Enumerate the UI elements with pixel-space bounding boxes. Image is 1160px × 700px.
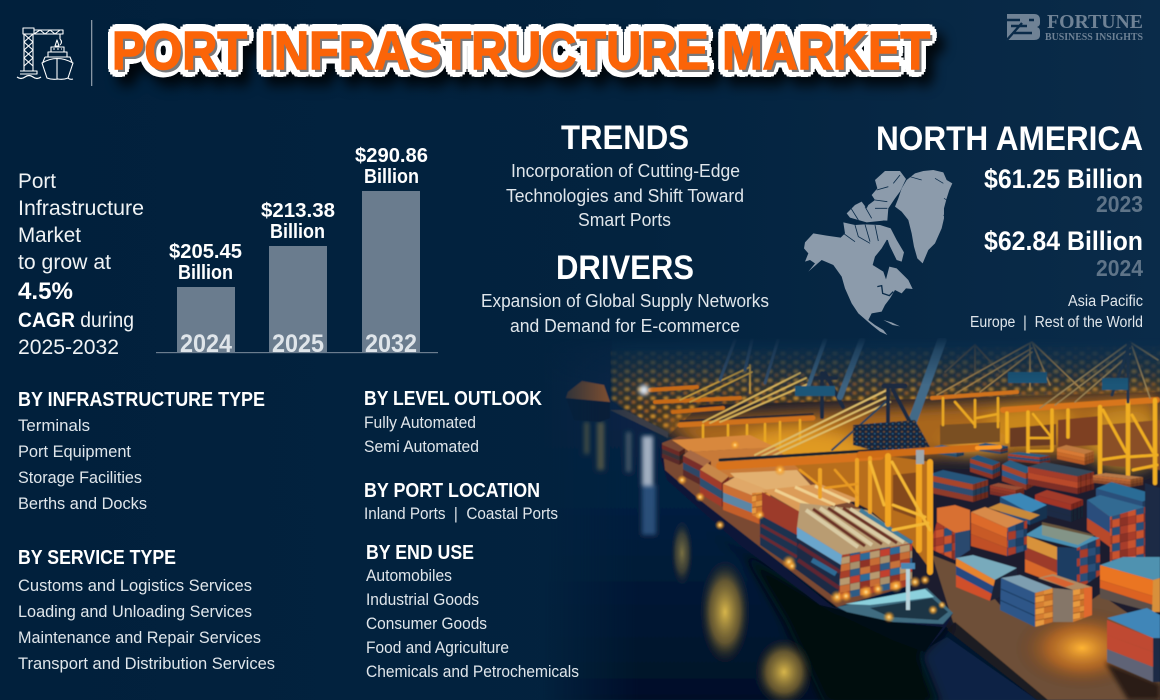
bar labels bbox=[169, 145, 428, 358]
panel: drivers: and Demand for E-commerce bbox=[510, 316, 740, 336]
panel: by port location: BY PORT LOCATION bbox=[364, 480, 540, 502]
photo: quay ground bbox=[932, 555, 1160, 700]
panel: North America figures: Europe | Rest of the World bbox=[970, 314, 1143, 331]
photo: black hull shadow on water bbox=[734, 548, 953, 700]
bar labels: Billion bbox=[364, 166, 419, 188]
photo: background cranes bbox=[650, 340, 1158, 483]
panel: North America figures: 2023 bbox=[1096, 191, 1143, 217]
panel: by infrastructure type: Port Equipment bbox=[18, 442, 131, 461]
text block: CAGR summary: to grow at bbox=[18, 251, 111, 274]
photo: far skyline lights bbox=[612, 345, 1160, 445]
panel: drivers bbox=[481, 249, 769, 336]
panel: North America figures: $61.25 Billion bbox=[984, 164, 1143, 194]
photo: sky haze over skyline bbox=[612, 344, 1160, 403]
photo: quay shadow bbox=[1105, 662, 1160, 700]
photo: ship container stacks bbox=[662, 435, 860, 570]
bar labels: $205.45 bbox=[169, 241, 242, 263]
panel: by infrastructure type: Terminals bbox=[18, 416, 90, 435]
container stack: bright orange right bbox=[1100, 557, 1160, 580]
panel: North America figures: Asia Pacific bbox=[1068, 293, 1143, 310]
panel: trends: Technologies and Shift Toward bbox=[506, 186, 744, 206]
photo: ship deck cargo base bbox=[662, 436, 912, 607]
icon: FB mark bbox=[1006, 14, 1040, 41]
text block: CAGR summary: Port bbox=[18, 170, 56, 193]
photo: warm area under main crane bbox=[795, 456, 928, 566]
bar labels: Billion bbox=[270, 221, 325, 243]
panel: by level outlook: Fully Automated bbox=[364, 413, 476, 432]
panel: North America figures: 2024 bbox=[1096, 255, 1143, 281]
bar labels: 2024 bbox=[180, 330, 232, 358]
container stack: gray and red bbox=[1038, 574, 1092, 590]
text block: CAGR summary: 4.5% bbox=[18, 278, 73, 305]
photo: foreground containers bbox=[956, 555, 1160, 682]
bar labels: $290.86 bbox=[355, 145, 428, 167]
photo: water strip by the bow bbox=[920, 637, 1037, 700]
photo: containers behind far gantry bbox=[940, 416, 1160, 470]
map: North America bbox=[804, 170, 952, 335]
photo: middle yard stacks bbox=[1025, 522, 1100, 590]
photo: main gantry crane bbox=[720, 340, 1000, 572]
photo: distant ship bbox=[566, 381, 668, 438]
panel: by infrastructure type: Storage Facilities bbox=[18, 468, 142, 487]
panel: drivers: DRIVERS bbox=[556, 249, 694, 287]
photo: yard base bbox=[669, 392, 1160, 629]
text block: CAGR summary: Market bbox=[18, 224, 81, 247]
photo: quay glow bbox=[1028, 615, 1116, 682]
photo: orange yard stacks bbox=[933, 503, 1040, 560]
map land bbox=[804, 170, 952, 335]
icon: crane and ship bbox=[17, 28, 73, 79]
panel: by service type: Customs and Logistics Services bbox=[18, 576, 252, 595]
photo: far yard containers bbox=[928, 443, 1158, 526]
panel: by end use: Chemicals and Petrochemicals bbox=[366, 662, 579, 681]
container stack: orange blue red bbox=[956, 555, 1017, 580]
photo: hull lower dark band bbox=[820, 605, 943, 652]
panel: North America figures: $62.84 Billion bbox=[984, 226, 1143, 256]
panel: North America figures: NORTH AMERICA bbox=[876, 120, 1143, 158]
photo: warm yard glow bbox=[660, 392, 1160, 481]
logo tagline: BUSINESS INSIGHTS bbox=[1045, 32, 1143, 43]
container stack: bottom right bbox=[1107, 608, 1160, 638]
text block: CAGR summary: CAGR during bbox=[18, 309, 134, 332]
bar labels: Billion bbox=[178, 262, 233, 284]
photo: containers seen through main crane bbox=[892, 472, 916, 518]
logo wordmark: FORTUNE bbox=[1047, 11, 1143, 33]
panel: drivers: Expansion of Global Supply Networks bbox=[481, 291, 769, 311]
panel: trends: Incorporation of Cutting-Edge bbox=[511, 161, 740, 181]
panel: by port location: Inland Ports | Coastal Ports bbox=[364, 504, 558, 523]
panel: trends: Smart Ports bbox=[578, 210, 671, 230]
panel: by level outlook: Semi Automated bbox=[364, 437, 479, 456]
photo: ship bow deck bbox=[837, 563, 953, 624]
photo: container port at night bbox=[530, 338, 1160, 700]
panel: by end use: BY END USE bbox=[366, 542, 474, 564]
text block: CAGR summary: 2025-2032 bbox=[18, 336, 119, 359]
panel: by end use: Industrial Goods bbox=[366, 590, 479, 609]
bar 2024 bbox=[177, 287, 235, 352]
panel: by service type bbox=[18, 547, 275, 673]
panel: by service type: BY SERVICE TYPE bbox=[18, 547, 176, 569]
panel: by end use: Food and Agriculture bbox=[366, 638, 509, 657]
panel: by service type: Transport and Distribution Services bbox=[18, 654, 275, 673]
photo: water bbox=[530, 340, 1160, 700]
photo: deck lamps bbox=[677, 440, 946, 623]
photo: right yard stack bbox=[1087, 483, 1160, 575]
panel: by infrastructure type bbox=[18, 389, 265, 513]
photo: front ship stack bbox=[797, 503, 912, 600]
panel: by service type: Maintenance and Repair Services bbox=[18, 628, 261, 647]
panel: by end use bbox=[366, 542, 579, 681]
panel: by port location bbox=[364, 480, 558, 523]
map inland water bbox=[843, 175, 947, 296]
logo: Fortune Business Insights bbox=[1006, 11, 1143, 43]
panel: by level outlook: BY LEVEL OUTLOOK bbox=[364, 388, 542, 410]
bar chart bbox=[156, 145, 438, 358]
panel: by end use: Automobiles bbox=[366, 566, 452, 585]
panel: by end use: Consumer Goods bbox=[366, 614, 487, 633]
bar labels: 2025 bbox=[272, 330, 324, 358]
photo: water reflections bbox=[584, 422, 813, 700]
divider bbox=[91, 20, 92, 86]
bar 2032 bbox=[362, 191, 420, 352]
bar labels: $213.38 bbox=[261, 200, 335, 222]
panel: trends bbox=[506, 119, 744, 230]
photo: quay wall bbox=[947, 622, 1048, 700]
text block: CAGR summary bbox=[18, 170, 144, 359]
panel: by level outlook bbox=[364, 388, 542, 456]
photo: ship hull bbox=[661, 443, 953, 652]
panel: by infrastructure type: BY INFRASTRUCTURE TYPE bbox=[18, 389, 265, 411]
panel: by infrastructure type: Berths and Docks bbox=[18, 494, 147, 513]
container stack: blue and lit orange bbox=[1001, 575, 1053, 593]
title: PORT INFRASTRUCTURE MARKET bbox=[112, 21, 930, 81]
panel: trends: TRENDS bbox=[561, 119, 689, 157]
axis bbox=[156, 352, 438, 353]
bar labels: 2032 bbox=[365, 330, 417, 358]
panel: North America figures bbox=[876, 120, 1143, 331]
bar 2025 bbox=[269, 246, 327, 352]
text block: CAGR summary: Infrastructure bbox=[18, 197, 144, 220]
panel: by service type: Loading and Unloading Services bbox=[18, 602, 252, 621]
